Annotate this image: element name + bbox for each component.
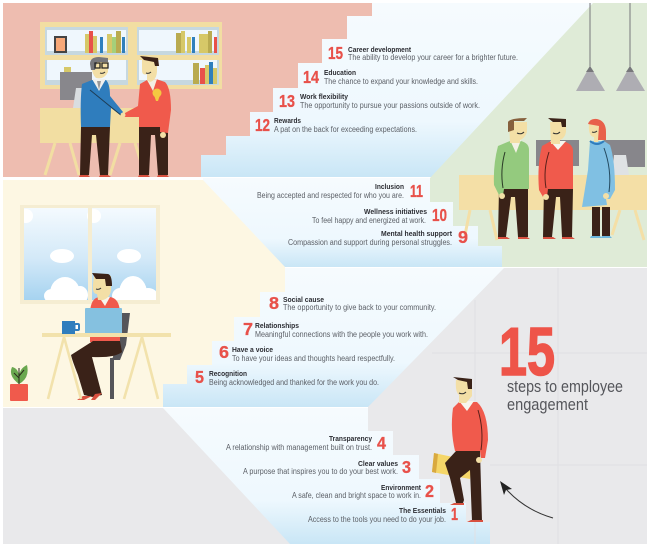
text: step 1 the essentials: 1 [451,504,458,524]
text: step 10 wellness initiatives [312,205,447,225]
text: step 9 mental health support: Mental health support [381,229,452,238]
text: step 8 social cause: The opportunity to give back to your community. [283,303,436,312]
panel: pink office [3,3,372,177]
text: step 14 education: The chance to expand your knowledge and skills. [324,77,478,86]
text: step 14 education: 14 [303,67,319,87]
text: step 8 social cause: Social cause [283,295,324,304]
text: step 15 career development: Career development [348,45,411,54]
heading: 15 steps to employee engagement: steps to employee [507,378,623,396]
text: step 8 social cause: 8 [269,293,279,313]
text: step 12 rewards: A pat on the back for exceeding expectations. [274,125,417,134]
text: step 3 clear values [243,457,411,477]
text: step 4 transparency: A relationship with management built on trust. [226,443,372,452]
heading: 15 steps to employee engagement [499,314,623,414]
text: step 9 mental health support: 9 [458,227,468,247]
text: step 7 relationships [243,319,428,339]
text: step 4 transparency [226,433,386,453]
heading: 15 steps to employee engagement: engagement [507,396,588,414]
text: step 6 have a voice [219,342,395,363]
text: step 6 have a voice: 6 [219,342,229,362]
text: step 2 environment [292,481,434,501]
text: step 10 wellness initiatives: 10 [432,205,447,225]
panel: green office [430,3,647,267]
text: step 9 mental health support [288,227,468,247]
text: step 12 rewards: Rewards [274,116,301,125]
icon: pendant lamps [576,3,645,91]
figure: man climbing the first step [432,377,488,522]
text: step 11 inclusion [257,181,423,201]
text: step 15 career development: 15 [328,43,343,63]
text: step 6 have a voice: To have your ideas and thoughts heard respectfully. [232,354,395,363]
figure: woman in blue dress [582,119,615,238]
bookshelf [40,22,222,89]
figure: person working at laptop [71,273,130,400]
text: step 6 have a voice: Have a voice [232,345,273,354]
text: step 7 relationships: Meaningful connections with the people you work with. [255,330,428,339]
text: step 2 environment: 2 [425,481,434,501]
text: step 4 transparency: 4 [377,433,386,453]
panel: grey wall right [368,268,647,544]
staircase background: third flight [163,268,508,407]
text: step 5 recognition: Recognition [209,369,247,378]
panel: grey floor left [3,408,290,544]
icon: blue mug [62,321,80,334]
text: step 10 wellness initiatives: To feel happy and energized at work. [312,216,426,225]
text: step 4 transparency: Transparency [329,434,373,443]
text: step 12 rewards [255,115,417,135]
text: step 14 education: Education [324,68,356,77]
text: step 5 recognition: Being acknowledged and thanked for the work you do. [209,378,379,387]
text: step 7 relationships: 7 [243,319,253,339]
text: step 2 environment: A safe, clean and bright space to work in. [292,491,421,500]
text: step 15 career development: The ability to develop your career for a brighter future. [348,53,518,62]
figure: man in green sweater [494,118,530,239]
text: step 8 social cause [269,293,436,313]
text: step 13 work flexibility: Work flexibility [300,92,349,101]
text: step 13 work flexibility: 13 [279,91,295,111]
text: step 11 inclusion: 11 [410,181,423,201]
text: step 1 the essentials: The Essentials [399,506,446,515]
icon: potted plant [10,365,28,401]
text: step 3 clear values: 3 [402,457,411,477]
office desk and monitor [40,67,145,175]
panel: yellow room [3,180,285,407]
staircase background: second flight [203,178,503,267]
text: step 2 environment: Environment [381,483,421,492]
desk with A-frame legs [42,333,171,399]
text: step 7 relationships: Relationships [255,321,299,330]
text: step 3 clear values: A purpose that inspires you to do your best work. [243,467,398,476]
text: step 14 education [303,67,478,87]
staircase background: bottom flight [163,408,490,544]
text: step 15 career development [328,43,518,63]
window with sky and clouds [19,205,160,310]
text: step 13 work flexibility: The opportunity to pursue your passions outside of work. [300,101,480,110]
arrow: upward direction [500,481,553,518]
text: step 1 the essentials [308,504,458,524]
text: step 10 wellness initiatives: Wellness initiatives [364,207,427,216]
text: step 3 clear values: Clear values [358,459,398,468]
text: step 12 rewards: 12 [255,115,270,135]
figure: man in red sweater [538,118,575,239]
staircase background: top flight [201,3,601,177]
text: step 5 recognition [195,367,379,387]
text: step 1 the essentials: Access to the tools you need to do your job. [308,515,446,524]
figure: employee in red with rosette [120,56,171,177]
heading: 15 steps to employee engagement: 15 [499,314,555,390]
figure: manager in blue jacket [79,57,123,177]
green office desk and monitors [459,140,647,240]
text: step 5 recognition: 5 [195,367,204,387]
text: step 11 inclusion: Being accepted and respected for who you are. [257,191,404,200]
text: step 11 inclusion: Inclusion [375,182,404,191]
text: step 9 mental health support: Compassion and support during personal struggles. [288,238,452,247]
text: step 13 work flexibility [279,91,480,111]
